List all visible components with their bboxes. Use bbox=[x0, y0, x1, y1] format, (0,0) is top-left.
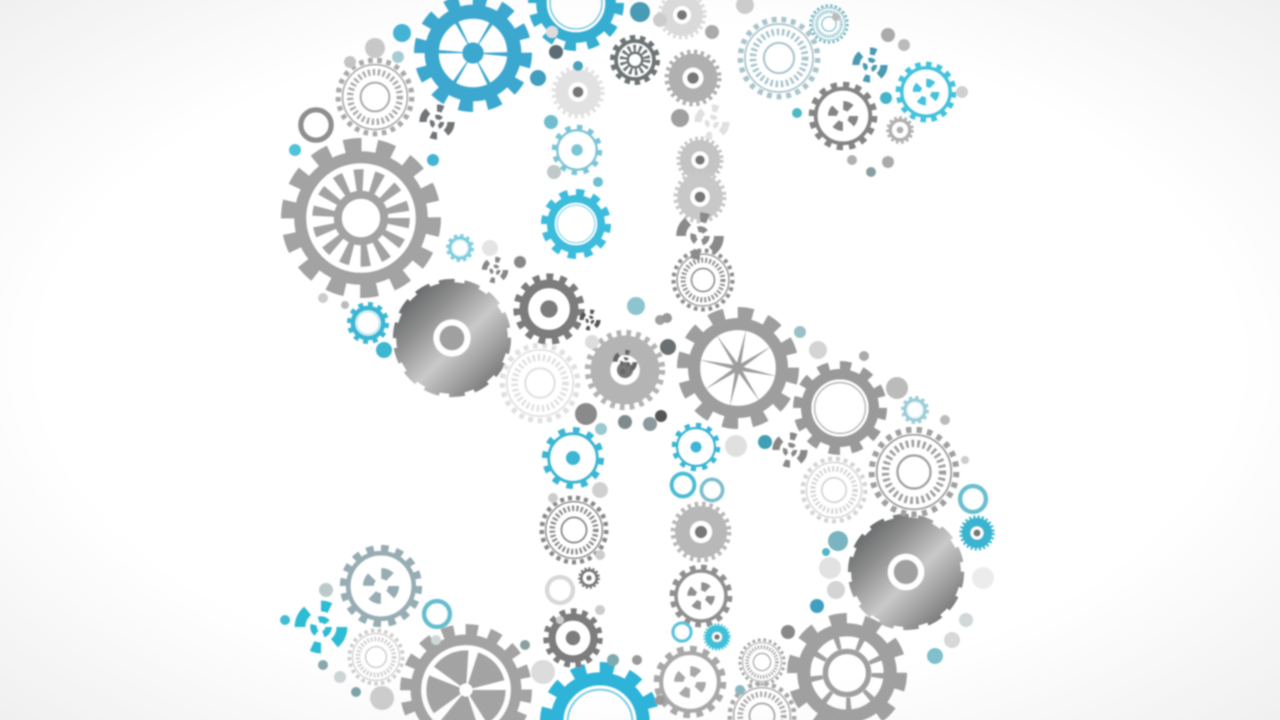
teal gear: top centre bbox=[533, 0, 619, 46]
dollar sign gears, softened bbox=[280, 0, 994, 720]
fan blade gear: bottom left bbox=[407, 631, 525, 720]
medium and small grey gears bbox=[301, 0, 956, 720]
ring gear: right centre bbox=[798, 366, 882, 450]
solid metal gear: left centre bbox=[396, 282, 508, 394]
teal accent gears bbox=[300, 6, 993, 650]
star spoke gear: centre bbox=[683, 313, 793, 423]
teal gear: bottom centre bbox=[546, 668, 654, 720]
large gear: upper left bbox=[289, 146, 433, 290]
wheel gear: bottom right bbox=[793, 619, 901, 720]
small dots bbox=[280, 0, 994, 710]
teal gear: top left bbox=[420, 0, 526, 106]
solid metal gear: right lower bbox=[851, 517, 961, 627]
